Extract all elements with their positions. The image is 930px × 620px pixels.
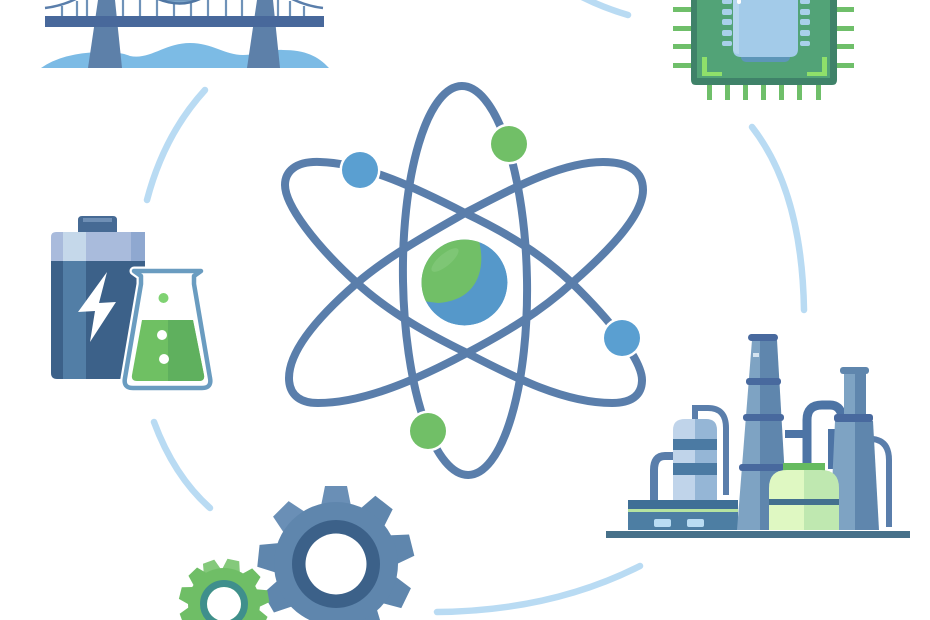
hangers (62, 0, 304, 16)
corner marks (702, 57, 722, 76)
nucleus (422, 240, 508, 326)
ring arcs (147, 0, 804, 612)
cables (45, 0, 323, 8)
electron: green upper right (491, 126, 527, 162)
flask (125, 271, 210, 388)
bubbles (158, 293, 168, 303)
top pipe (695, 408, 726, 495)
electron: blue lower right (604, 320, 640, 356)
large gear (257, 486, 415, 620)
lightning bolt (78, 272, 116, 342)
platform (628, 500, 738, 509)
right tower (247, 0, 280, 68)
orbit rising to the right (289, 162, 643, 403)
right outlet pipe (873, 439, 889, 527)
electron: blue upper left (342, 152, 378, 188)
connecting pipes (785, 430, 807, 438)
green tank (783, 463, 825, 471)
right stack (844, 373, 855, 416)
electron: green lower left (410, 413, 446, 449)
ground base (606, 531, 910, 538)
left pipe (654, 456, 673, 502)
battery body (51, 232, 145, 261)
icon: microchip (673, 0, 854, 100)
battery terminal (78, 216, 117, 232)
vertical orbit (400, 85, 530, 476)
left tower (88, 0, 122, 68)
orbit falling to the right (285, 162, 642, 403)
small gear (178, 558, 270, 620)
vessel (673, 419, 695, 500)
main chimney (737, 340, 760, 530)
icon: gears (178, 486, 415, 620)
side pins (673, 7, 854, 100)
icon: battery and flask (51, 216, 210, 388)
icon: industrial plant (606, 334, 910, 538)
icon: atom (285, 85, 643, 476)
deck (45, 16, 324, 27)
icon: bridge (41, 0, 329, 68)
water (41, 43, 329, 68)
board (691, 0, 837, 85)
die (741, 50, 790, 62)
contact pads (722, 0, 810, 46)
